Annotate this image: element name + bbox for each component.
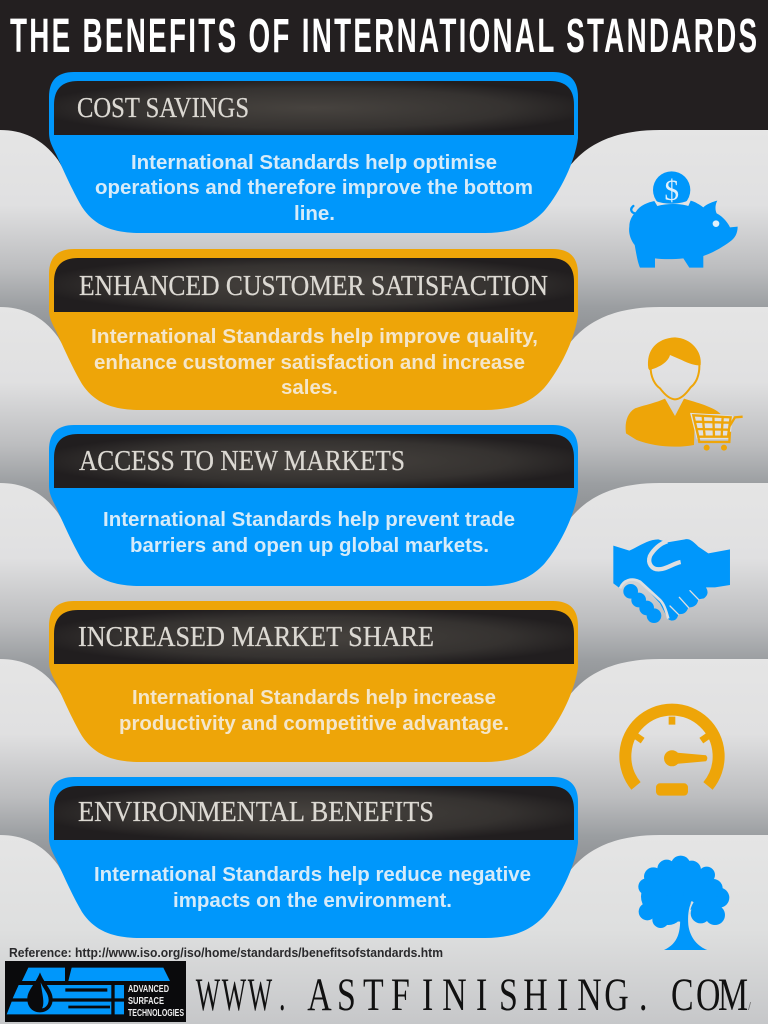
heading: ENHANCED CUSTOMER SATISFACTION	[79, 271, 548, 302]
body text: productivity and competitive advantage.	[119, 713, 509, 735]
panel: environmental benefits	[49, 777, 578, 938]
card shape	[49, 601, 578, 762]
body text	[95, 152, 533, 225]
card shape	[49, 249, 578, 410]
body text: operations and therefore improve the bottom	[95, 177, 533, 199]
panel: cost savings	[49, 72, 578, 233]
body text	[103, 509, 515, 557]
band 4	[0, 659, 768, 886]
icon: speedometer	[625, 710, 719, 796]
logo wordmark: SURFACE	[128, 996, 164, 1007]
header bar	[54, 258, 574, 312]
band 2	[0, 307, 768, 534]
logo wordmark: ADVANCED	[128, 984, 169, 995]
heading: ENVIRONMENTAL BENEFITS	[78, 797, 434, 828]
body text: International Standards help prevent trade	[103, 509, 515, 531]
card shape	[49, 777, 578, 938]
small slash mark: /	[748, 1001, 752, 1013]
header bar	[54, 786, 574, 840]
heading: INCREASED MARKET SHARE	[78, 622, 434, 653]
band 3	[0, 483, 768, 710]
icon: piggy bank	[629, 171, 738, 268]
icon: customer with shopping cart	[626, 337, 743, 451]
website url: WWW.	[196, 969, 285, 1021]
body text: International Standards help improve quality,	[91, 326, 538, 348]
panel: enhanced customer satisfaction	[49, 249, 578, 410]
body text: impacts on the environment.	[173, 890, 452, 912]
icon: handshake	[613, 539, 730, 623]
card shape	[49, 425, 578, 586]
reference line: Reference: http://www.iso.org/iso/home/standards/benefitsofstandards.htm	[9, 945, 443, 960]
logo wordmark: TECHNOLOGIES	[128, 1008, 184, 1019]
header bar	[54, 610, 574, 664]
logo: AST	[5, 961, 186, 1022]
title: THE BENEFITS OF INTERNATIONAL STANDARDS	[10, 9, 757, 63]
card shape	[49, 72, 578, 233]
band 1	[0, 130, 768, 357]
body text: International Standards help optimise	[131, 152, 497, 174]
header bar	[54, 434, 574, 488]
heading: COST SAVINGS	[77, 93, 249, 124]
band 5	[0, 835, 768, 1024]
body text: line.	[294, 203, 335, 225]
heading: ACCESS TO NEW MARKETS	[79, 446, 405, 477]
header bar	[54, 81, 574, 135]
icon: piggy bank: $	[664, 175, 679, 207]
body text	[119, 687, 509, 735]
body text: sales.	[281, 377, 338, 399]
body text: enhance customer satisfaction and increase	[94, 352, 525, 374]
body text: barriers and open up global markets.	[130, 535, 489, 557]
panel: access to new markets	[49, 425, 578, 586]
icon: tree	[638, 856, 729, 950]
logo wordmark	[128, 984, 184, 1019]
body text	[94, 864, 531, 912]
body text: International Standards help reduce negative	[94, 864, 531, 886]
website url: ASTFINISHING.COM	[307, 969, 748, 1020]
body text: International Standards help increase	[132, 687, 496, 709]
panel: increased market share	[49, 601, 578, 762]
body text	[91, 326, 538, 399]
